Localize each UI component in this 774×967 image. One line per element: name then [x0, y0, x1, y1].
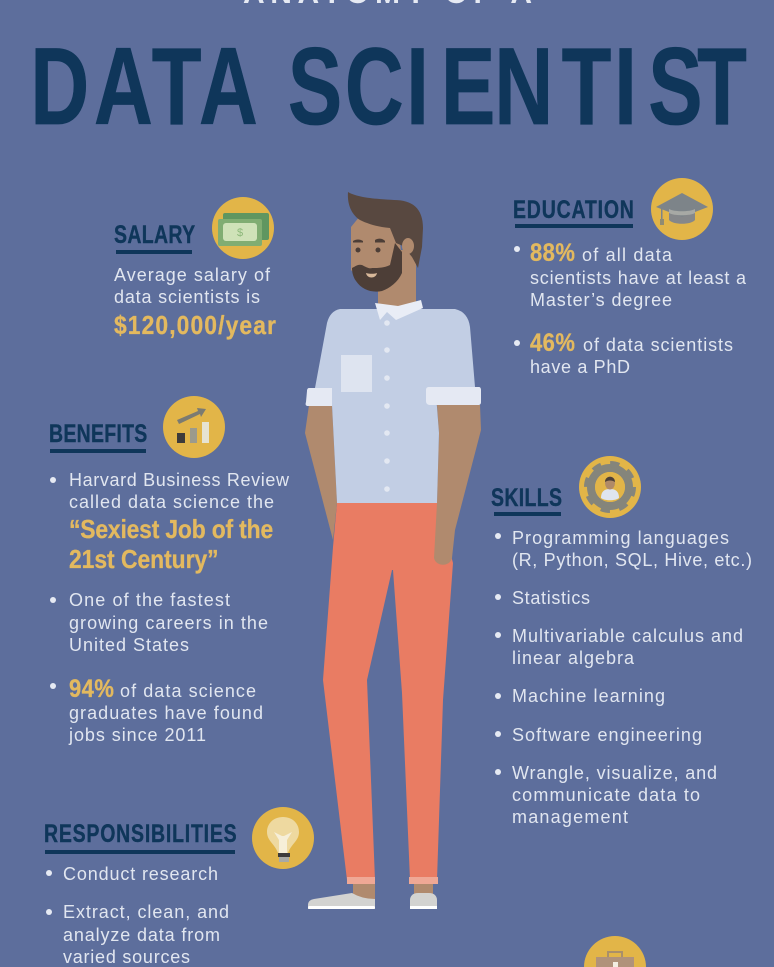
skills list: Wrangle, visualize, and: [512, 763, 717, 783]
salary text: $120,000/year: [114, 312, 276, 340]
education list: of data scientists: [583, 335, 733, 355]
benefits list: called data science the: [69, 492, 274, 512]
salary text: [114, 265, 276, 340]
skills list: (R, Python, SQL, Hive, etc.): [512, 550, 752, 570]
heading: skills: SKILLS: [491, 484, 562, 512]
skills list: communicate data to: [512, 785, 700, 805]
education list: Master’s degree: [530, 290, 672, 310]
benefits list: “Sexiest Job of the: [69, 516, 273, 544]
responsibilities list: analyze data from: [63, 925, 220, 945]
icon: rising bar chart: [163, 396, 225, 458]
benefits list: growing careers in the: [69, 613, 268, 633]
salary text: data scientists is: [114, 287, 260, 307]
beard: [352, 243, 402, 292]
panel: skills: [491, 456, 752, 827]
right arm: [434, 405, 481, 565]
benefits list: Harvard Business Review: [69, 470, 290, 490]
panel: benefits: [49, 396, 290, 745]
icon: gear with person: [579, 456, 641, 518]
education list: scientists have at least a: [530, 268, 747, 288]
panel: responsibilities: [44, 807, 314, 967]
education list: 88%: [530, 239, 575, 266]
responsibilities list: varied sources: [63, 947, 190, 967]
skills list: Machine learning: [512, 686, 665, 706]
education list: of all data: [582, 245, 673, 265]
skills list: management: [512, 807, 628, 827]
neck: [378, 282, 416, 310]
neck side fill: [390, 250, 416, 285]
title: DATA SCIENTIST: [30, 24, 747, 148]
skills list: Software engineering: [512, 725, 702, 745]
panel: salary: [114, 197, 276, 340]
skills list: [495, 528, 752, 827]
ear: [402, 238, 414, 254]
heading: salary: SALARY: [114, 221, 195, 249]
benefits list: United States: [69, 635, 189, 655]
sleeve cuffs: [306, 387, 481, 406]
icon: money: [212, 197, 274, 259]
skills list: Statistics: [512, 588, 590, 608]
icon: money: $: [237, 227, 243, 239]
eyes and brows: [353, 239, 385, 252]
skills list: Programming languages: [512, 528, 729, 548]
panel: education: [513, 178, 747, 377]
benefits list: graduates have found: [69, 703, 263, 723]
responsibilities list: Conduct research: [63, 864, 218, 884]
icon: light bulb: [252, 807, 314, 869]
ankles: [353, 884, 433, 899]
benefits list: [50, 470, 290, 745]
education list: [514, 239, 747, 377]
responsibilities list: Extract, clean, and: [63, 902, 229, 922]
mouth: [366, 273, 377, 278]
heading: benefits: BENEFITS: [49, 420, 147, 448]
benefits list: of data science: [120, 681, 256, 701]
skills list: Multivariable calculus and: [512, 626, 743, 646]
shirt pocket: [341, 355, 372, 392]
trousers: [323, 503, 453, 880]
education list: 46%: [530, 329, 575, 356]
illustration: data scientist figure: [305, 192, 481, 909]
skills list: linear algebra: [512, 648, 635, 668]
icon: briefcase partly cropped: [584, 936, 646, 967]
shirt: [315, 309, 475, 503]
trouser cuffs: [347, 877, 438, 884]
heading: responsibilities: RESPONSIBILITIES: [44, 820, 237, 848]
benefits list: One of the fastest: [69, 590, 230, 610]
benefits list: 94%: [69, 675, 114, 702]
face: [351, 216, 402, 285]
salary text: Average salary of: [114, 265, 271, 285]
benefits list: jobs since 2011: [68, 725, 206, 745]
education list: have a PhD: [530, 357, 630, 377]
benefits list: 21st Century”: [69, 546, 219, 574]
collar: [375, 300, 423, 320]
responsibilities list: [46, 864, 229, 967]
shirt buttons: [384, 320, 390, 492]
left arm: [305, 405, 337, 540]
hair: [348, 192, 423, 268]
icon: graduation cap: [651, 178, 713, 240]
shoes: [308, 893, 437, 909]
heading: education: EDUCATION: [513, 196, 634, 224]
